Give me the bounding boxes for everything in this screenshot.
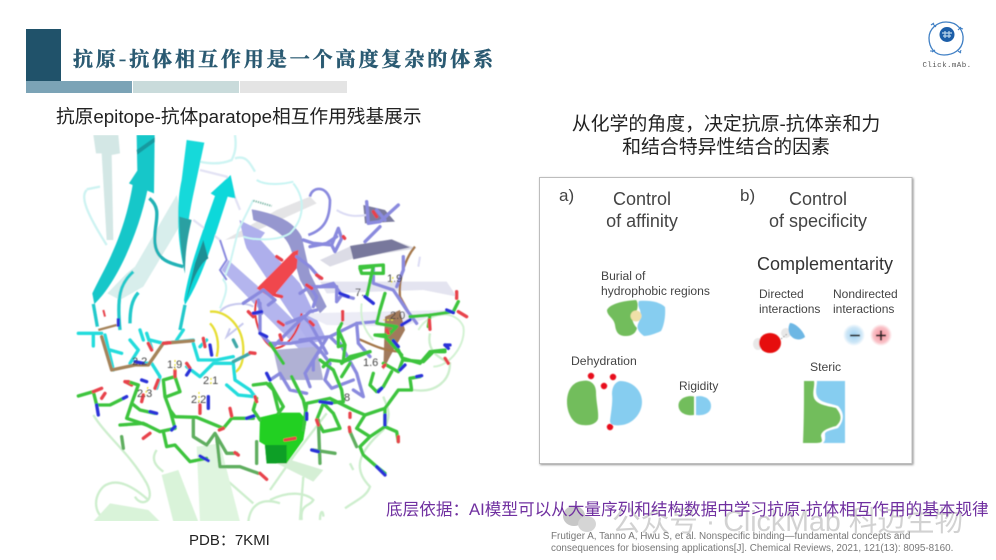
distance labels: 2.3 [137,388,152,400]
distance labels: 2.1 [203,375,218,387]
distance labels: 7. [355,287,364,299]
title: 抗原-抗体相互作用是一个高度复杂的体系 [73,43,496,72]
panel: control of affinity and specificity figure [540,178,912,464]
sub-panel b: control of specificity: Directed [759,287,804,301]
citation: Frutiger A, Tanno A, Hwu S, et al. Nonspecific binding—fundamental concepts and [551,531,910,542]
violet antibody sheets [210,180,330,380]
grey distant sheets [303,205,457,370]
sub-panel b: control of specificity: b) [740,186,755,205]
sub-panel b: control of specificity: of specificity [769,211,867,231]
watermark: WeChat public account: 公众号 · ClickMab 科迈生物 [612,506,963,538]
distance labels: 2.2 [191,394,206,406]
sub-panel a: control of affinity: of affinity [606,211,678,231]
sub-panel a: control of affinity: a) [559,186,574,205]
right heading [572,113,880,158]
protein structure render [78,135,467,522]
cyan residues [78,330,255,397]
cyan beta strands [92,135,155,304]
distance labels: 2.0 [390,310,405,322]
sub-panel b: control of specificity: Steric [810,360,841,374]
faint green chains [93,415,280,522]
right heading: 从化学的角度，决定抗原-抗体亲和力 [572,113,880,135]
sub-panel a: control of affinity [559,186,718,430]
sub-panel b: control of specificity [740,186,898,443]
sub-panel b: control of specificity: Nondirected [833,287,898,301]
PDB label: PDB：7KMI [189,532,270,549]
distance labels: 1.9 [387,273,402,285]
brown backbone [383,310,405,370]
citation: consequences for biosensing applications[J]. Chemical Reviews, 2021, 121(13): 8095-8160. [551,543,953,554]
subtitle: residue display: 抗原epitope-抗体paratope相互作用残基展示 [56,106,422,127]
logo: Click.mAb: Click.mAb. [922,62,972,70]
distance labels: 1.6 [363,357,378,369]
sub-panel a: control of affinity: Burial of [601,269,646,283]
sub-panel b: control of specificity: interactions [833,302,894,316]
logo: Click.mAb [922,22,972,70]
green residues, left [78,371,278,479]
faint background ribbons, upper [84,135,255,330]
header band [26,29,347,93]
sub-panel a: control of affinity: hydrophobic regions [601,284,710,298]
violet residues, center [243,237,337,353]
distance labels: 1.9 [167,359,182,371]
sub-panel a: control of affinity: Rigidity [679,379,718,393]
green beta strand [259,413,307,463]
sub-panel a: control of affinity: Dehydration [571,354,637,368]
violet residues, right [300,202,417,370]
distance labels: 2.2 [132,356,147,368]
distance labels: 8 [344,392,350,404]
sub-panel b: control of specificity: Complementarity [757,254,893,274]
green residues, right [270,335,450,475]
purple takeaway line: 底层依据：AI模型可以从大量序列和结构数据中学习抗原-抗体相互作用的基本规律 [386,500,989,519]
distance labels [132,273,405,406]
citation [551,531,953,554]
sub-panel a: control of affinity: Control [613,189,671,209]
sub-panel b: control of specificity: interactions [759,302,820,316]
sub-panel b: control of specificity: Control [789,189,847,209]
right heading: 和结合特异性结合的因素 [622,136,830,158]
